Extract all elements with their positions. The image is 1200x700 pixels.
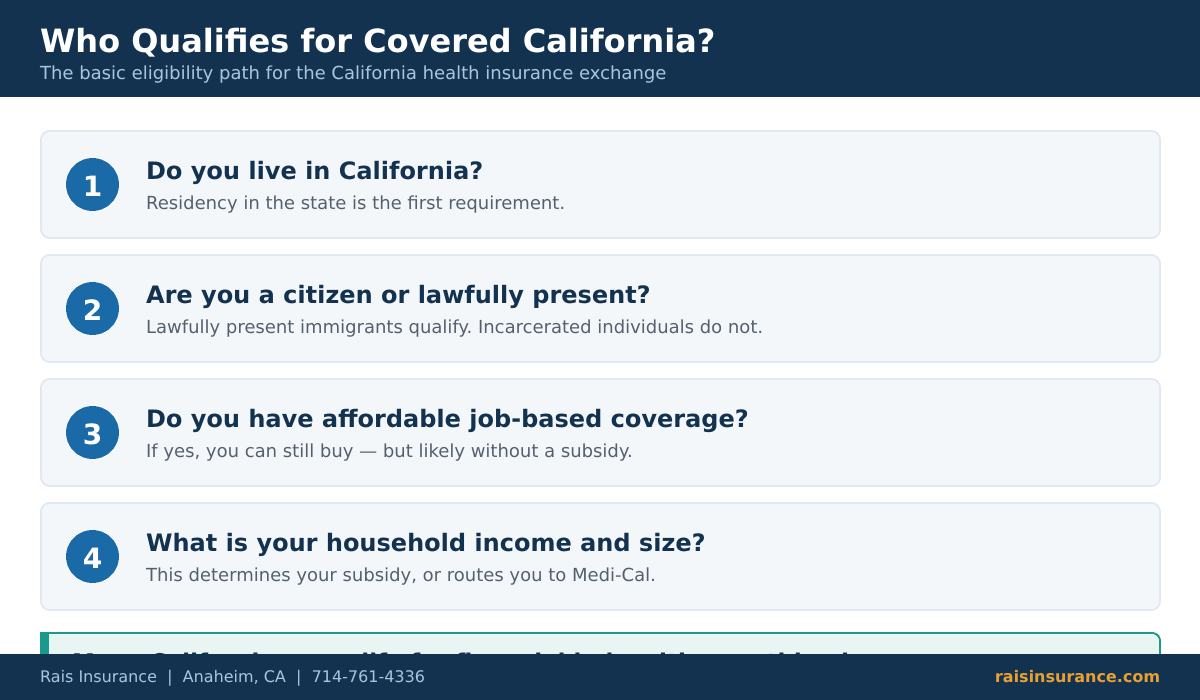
callout text: Many Californians qualify for financial help with monthly plans	[72, 650, 895, 676]
step 1 heading: Do you live in California?	[146, 157, 483, 185]
step 1 description: Residency in the state is the first requirement.	[146, 193, 565, 214]
step 1 number: 1	[83, 170, 102, 203]
header band	[0, 0, 1200, 97]
step 3 number: 3	[83, 418, 102, 451]
footer band	[0, 654, 1200, 700]
step 4 heading: What is your household income and size?	[146, 529, 706, 557]
footer contact: Rais Insurance | Anaheim, CA | 714-761-4336	[40, 667, 425, 686]
panel: step 4	[40, 502, 1161, 611]
step 2 number	[66, 282, 119, 335]
title: Who Qualifies for Covered California?	[40, 22, 715, 60]
subtitle: The basic eligibility path for the California health insurance exchange	[40, 63, 666, 84]
footer website: raisinsurance.com	[995, 667, 1160, 686]
step 4 number	[66, 530, 119, 583]
step 2 heading: Are you a citizen or lawfully present?	[146, 281, 651, 309]
callout: clipped note	[40, 632, 1161, 676]
step 4 description: This determines your subsidy, or routes you to Medi-Cal.	[146, 565, 656, 586]
step 3 description: If yes, you can still buy — but likely without a subsidy.	[146, 441, 633, 462]
panel: step 3	[40, 378, 1161, 487]
step 4 number: 4	[83, 542, 102, 575]
step 2 description: Lawfully present immigrants qualify. Incarcerated individuals do not.	[146, 317, 763, 338]
step 3 number	[66, 406, 119, 459]
step 3 heading: Do you have affordable job-based coverage?	[146, 405, 749, 433]
panel: step 1	[40, 130, 1161, 239]
panel: step 2	[40, 254, 1161, 363]
step 2 number: 2	[83, 294, 102, 327]
step 1 number	[66, 158, 119, 211]
